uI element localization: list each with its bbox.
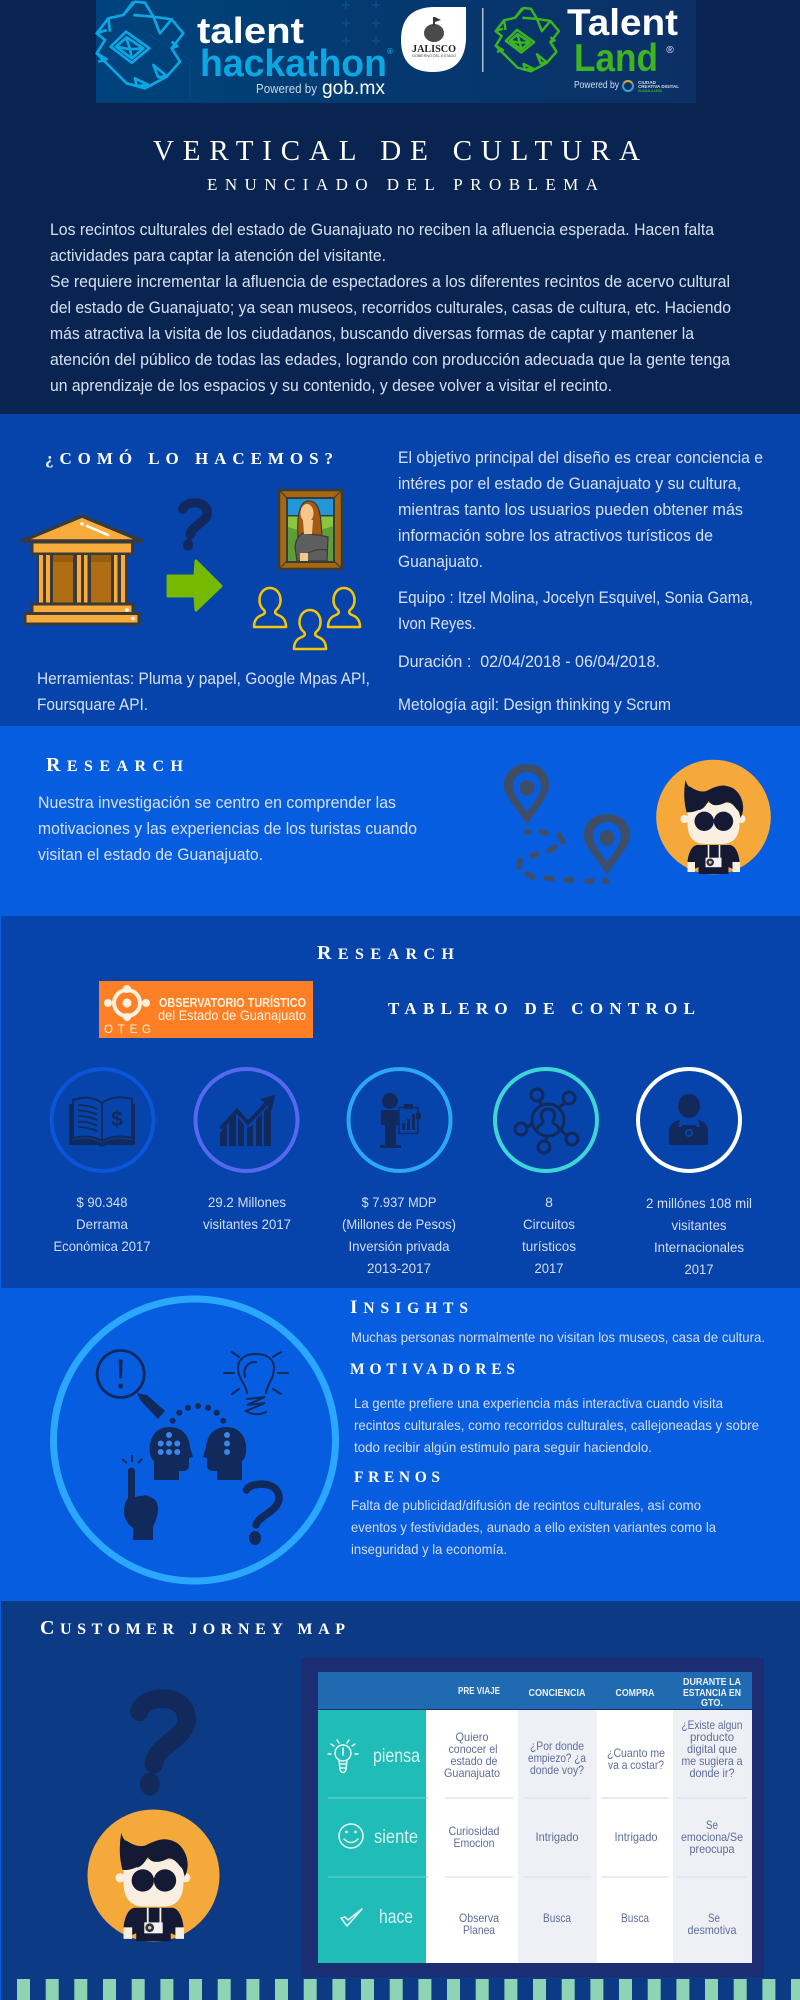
problem statement text: un aprendizaje de los espacios y su contenido, y desee volver a visitar el recinto. xyxy=(50,376,612,395)
duration text: Duración : 02/04/2018 - 06/04/2018. xyxy=(398,652,660,671)
objective text: información sobre los atractivos turísticos de xyxy=(398,526,713,545)
research text: visitan el estado de Guanajuato. xyxy=(38,845,263,864)
stat label: 2013-2017 xyxy=(367,1260,431,1276)
stat: tourist circuits xyxy=(495,1069,597,1276)
subtitle: ENUNCIADO DEL PROBLEMA xyxy=(207,175,599,194)
insights illustration in circle xyxy=(54,1299,336,1581)
stat label: Circuitos xyxy=(523,1216,575,1232)
stat label: Inversión privada xyxy=(348,1238,450,1254)
row label: hace: hace xyxy=(379,1907,413,1928)
talent hackathon wordmark: gob.mx xyxy=(322,78,385,99)
stat label: visitantes 2017 xyxy=(203,1216,291,1232)
row: piensa cells: Guanajuato xyxy=(444,1766,500,1780)
row: piensa cells: me sugiera a xyxy=(682,1754,743,1768)
icon: talent hackathon logo xyxy=(97,2,183,88)
icon: Talent Land logo xyxy=(496,8,559,71)
row: piensa cells: empiezo? ¿a xyxy=(528,1751,586,1765)
icon: tourist character xyxy=(87,1809,220,1942)
stat: economic spill xyxy=(52,1069,154,1254)
stat label xyxy=(203,1194,291,1232)
icon: route with two map pins xyxy=(504,764,630,881)
row: piensa cells xyxy=(444,1718,743,1780)
Talent Land wordmark: CIUDAD xyxy=(638,80,657,85)
row label: piensa xyxy=(328,1740,420,1772)
Talent Land wordmark: ® xyxy=(666,45,674,56)
brakes text: inseguridad y la economía. xyxy=(351,1541,507,1557)
icon: question mark xyxy=(246,1484,279,1545)
row: hace cells: Busca xyxy=(543,1911,571,1925)
Jalisco emblem xyxy=(401,7,466,72)
icon: light bulb xyxy=(224,1352,288,1414)
row: piensa cells: donde voy? xyxy=(530,1763,584,1777)
table header: PRE VIAJE xyxy=(458,1686,500,1697)
talent hackathon wordmark: hackathon xyxy=(200,43,387,85)
table header: DURANTE LA xyxy=(683,1677,741,1688)
icon: tourist character xyxy=(656,760,771,874)
research text: motivaciones y las experiencias de los turistas cuando xyxy=(38,819,417,838)
stat label: 2 millónes 108 mil xyxy=(646,1195,752,1211)
panel: como lo hacemos xyxy=(0,414,800,726)
tools text: Foursquare API. xyxy=(37,695,148,714)
row: hace cells: Busca xyxy=(621,1911,649,1925)
icon: framed Mona Lisa painting xyxy=(279,490,342,569)
tools text: Herramientas: Pluma y papel, Google Mpas API, xyxy=(37,669,370,688)
problem statement text: actividades para captar la atención del visitante. xyxy=(50,246,386,265)
stat: visitors xyxy=(196,1069,298,1232)
row: piensa cells: conocer el xyxy=(448,1742,498,1756)
stat label xyxy=(54,1194,151,1254)
motivators text xyxy=(354,1395,759,1455)
stat label: 2017 xyxy=(684,1261,714,1277)
OTEG logo: del Estado de Guanajuato xyxy=(158,1007,306,1023)
icon: three people xyxy=(254,588,360,649)
stat label: Internacionales xyxy=(654,1239,744,1255)
icon: open book with dollar: $ xyxy=(111,1108,123,1131)
panel: insights xyxy=(0,1288,800,1601)
row: hace cells xyxy=(459,1911,737,1937)
problem statement text: más atractiva la visita de los ciudadanos, buscando diversas formas de captar y mantener la xyxy=(50,324,695,343)
Talent Land wordmark: Powered by xyxy=(574,80,619,91)
talent hackathon wordmark: talent xyxy=(197,10,304,51)
row: piensa cells: digital que xyxy=(687,1742,737,1756)
problem statement text: Se requiere incrementar la afluencia de espectadores a los diferentes recintos de acervo cultural xyxy=(50,272,730,291)
Jalisco emblem: JALISCO xyxy=(412,44,456,55)
stat label xyxy=(342,1194,456,1276)
heading: R ESEARCH xyxy=(317,942,455,964)
row: piensa cells: estado de xyxy=(450,1754,498,1768)
row label: hace xyxy=(341,1907,413,1928)
icon: dotted arc between heads xyxy=(170,1403,226,1424)
team text: Ivon Reyes. xyxy=(398,614,476,633)
panel: research intro xyxy=(0,726,800,916)
title: VERTICAL DE CULTURA xyxy=(153,135,640,167)
stat label: Derrama xyxy=(76,1216,128,1232)
methodology text: Metología agil: Design thinking y Scrum xyxy=(398,695,671,714)
row: hace cells: Planea xyxy=(463,1923,495,1937)
objective text: intéres por el estado de Guanajuato y su cultura, xyxy=(398,474,741,493)
icon: two heads xyxy=(150,1427,246,1480)
research text xyxy=(38,793,417,864)
panel: header problem statement xyxy=(0,0,800,414)
stat label: Económica 2017 xyxy=(54,1238,151,1254)
OTEG logo xyxy=(99,981,313,1038)
row: siente cells: Curiosidad xyxy=(448,1824,500,1838)
heading: C USTOMER JORNEY MAP xyxy=(40,1617,345,1639)
row: piensa cells: va a costar? xyxy=(608,1758,664,1772)
icon: magnifier with exclamation xyxy=(97,1350,165,1419)
icon: rising chart xyxy=(220,1095,275,1146)
Talent Land wordmark xyxy=(567,2,679,93)
talent hackathon wordmark xyxy=(197,10,393,99)
icon: tourist with camera xyxy=(669,1094,708,1145)
row label: piensa: piensa xyxy=(373,1746,420,1767)
tools text xyxy=(37,669,370,714)
stat label: turísticos xyxy=(522,1238,576,1254)
insights heading: I NSIGHTS xyxy=(350,1297,468,1318)
row: siente cells: preocupa xyxy=(690,1842,735,1856)
row label: siente: siente xyxy=(374,1827,418,1848)
stat label: 29.2 Millones xyxy=(208,1194,286,1210)
OTEG logo: OTEG xyxy=(104,1024,151,1036)
objective text: El objetivo principal del diseño es crear conciencia e xyxy=(398,448,763,467)
problem statement text xyxy=(50,220,731,395)
Jalisco emblem: GOBIERNO DEL ESTADO xyxy=(412,54,456,58)
stat label: $ 7.937 MDP xyxy=(362,1194,436,1210)
stat: international visitors xyxy=(638,1069,752,1277)
table header xyxy=(458,1677,741,1709)
OTEG logo: OBSERVATORIO TURÍSTICO xyxy=(159,995,306,1010)
problem statement text: del estado de Guanajuato; ya sean museos, recorridos culturales, casas de cultura, etc. Haciendo xyxy=(50,298,731,317)
row: piensa cells: ¿Existe algun xyxy=(682,1718,742,1732)
research text: Nuestra investigación se centro en comprender las xyxy=(38,793,396,812)
stat label: 8 xyxy=(545,1194,553,1210)
icon: big question mark xyxy=(139,1699,187,1796)
motivators text: La gente prefiere una experiencia más interactiva cuando visita xyxy=(354,1395,723,1411)
icon: pointing hand xyxy=(122,1455,158,1540)
team text: Equipo : Itzel Molina, Jocelyn Esquivel, Sonia Gama, xyxy=(398,588,753,607)
icon: question mark xyxy=(183,503,207,550)
icon: network of people xyxy=(515,1089,578,1153)
insights text: Muchas personas normalmente no visitan los museos, casa de cultura. xyxy=(351,1329,765,1345)
talent hackathon wordmark: ® xyxy=(387,47,393,56)
row: hace cells: Observa xyxy=(459,1911,499,1925)
dashboard heading: TABLERO DE CONTROL xyxy=(388,999,695,1018)
row: hace cells: desmotiva xyxy=(688,1923,737,1937)
Talent Land wordmark: CREATIVA DIGITAL xyxy=(638,84,679,89)
problem statement text: Los recintos culturales del estado de Guanajuato no reciben la afluencia esperada. Hacen falta xyxy=(50,220,715,239)
row: siente cells: Emocion xyxy=(454,1836,494,1850)
row: siente cells: emociona/Se xyxy=(681,1830,743,1844)
Talent Land wordmark: Talent xyxy=(567,2,678,43)
brakes text xyxy=(351,1497,716,1557)
row: piensa cells: Quiero xyxy=(456,1730,489,1744)
objective text xyxy=(398,448,763,571)
row: piensa cells: ¿Por donde xyxy=(530,1739,584,1753)
motivators text: todo recibir algún estimulo para seguir haciendolo. xyxy=(354,1439,652,1455)
icon: open book with dollar xyxy=(69,1097,135,1147)
row: hace cells: Se xyxy=(708,1911,720,1925)
icon: green arrow xyxy=(168,561,221,610)
stat label xyxy=(522,1194,576,1276)
table header: GTO. xyxy=(701,1698,723,1709)
stat label: 2017 xyxy=(534,1260,564,1276)
row: siente cells xyxy=(448,1818,743,1856)
heading: R ESEARCH xyxy=(46,754,184,776)
stat label xyxy=(646,1195,752,1277)
objective text: mientras tanto los usuarios pueden obtener más xyxy=(398,500,743,519)
table header: CONCIENCIA xyxy=(528,1688,586,1699)
icon: museum xyxy=(22,516,142,624)
row: piensa cells: producto xyxy=(690,1730,734,1744)
stat label: visitantes xyxy=(672,1217,726,1233)
row: siente cells: Intrigado xyxy=(536,1830,579,1844)
journey map table xyxy=(301,1658,764,1977)
Talent Land wordmark: Land xyxy=(574,37,658,80)
stat: private investment xyxy=(342,1069,456,1276)
panel: customer journey map xyxy=(1,1601,800,2000)
heading: ¿COMÓ LO HACEMOS? xyxy=(45,449,333,468)
panel: research dashboard xyxy=(1,916,800,1288)
row: siente cells: Intrigado xyxy=(614,1830,658,1844)
motivators text: recintos culturales, como recorridos culturales, callejoneadas y sobre xyxy=(354,1417,759,1433)
row: piensa cells: donde ir? xyxy=(690,1766,735,1780)
team text xyxy=(398,588,753,633)
brakes text: Falta de publicidad/difusión de recintos culturales, así como xyxy=(351,1497,701,1513)
table header: COMPRA xyxy=(616,1688,654,1699)
motivators heading: MOTIVADORES xyxy=(350,1361,515,1378)
Talent Land wordmark: GUADALAJARA xyxy=(638,88,662,93)
row: siente cells: Se xyxy=(706,1818,718,1832)
logo banner: talent hackathon and Talent Land xyxy=(96,0,696,103)
stat label: (Millones de Pesos) xyxy=(342,1216,456,1232)
stat label: $ 90.348 xyxy=(76,1194,128,1210)
icon: businessman with clipboard xyxy=(380,1093,421,1148)
objective text: Guanajuato. xyxy=(398,552,483,571)
brakes heading: FRENOS xyxy=(354,1469,440,1486)
problem statement text: atención del público de todas las edades, logrando con producción adecuada que la gente tenga xyxy=(50,350,731,369)
talent hackathon wordmark: Powered by xyxy=(256,82,318,96)
row: piensa cells: ¿Cuanto me xyxy=(607,1746,665,1760)
table header: ESTANCIA EN xyxy=(683,1688,741,1699)
row label: siente xyxy=(339,1824,418,1848)
brakes text: eventos y festividades, aunado a ello existen variantes como la xyxy=(351,1519,716,1535)
